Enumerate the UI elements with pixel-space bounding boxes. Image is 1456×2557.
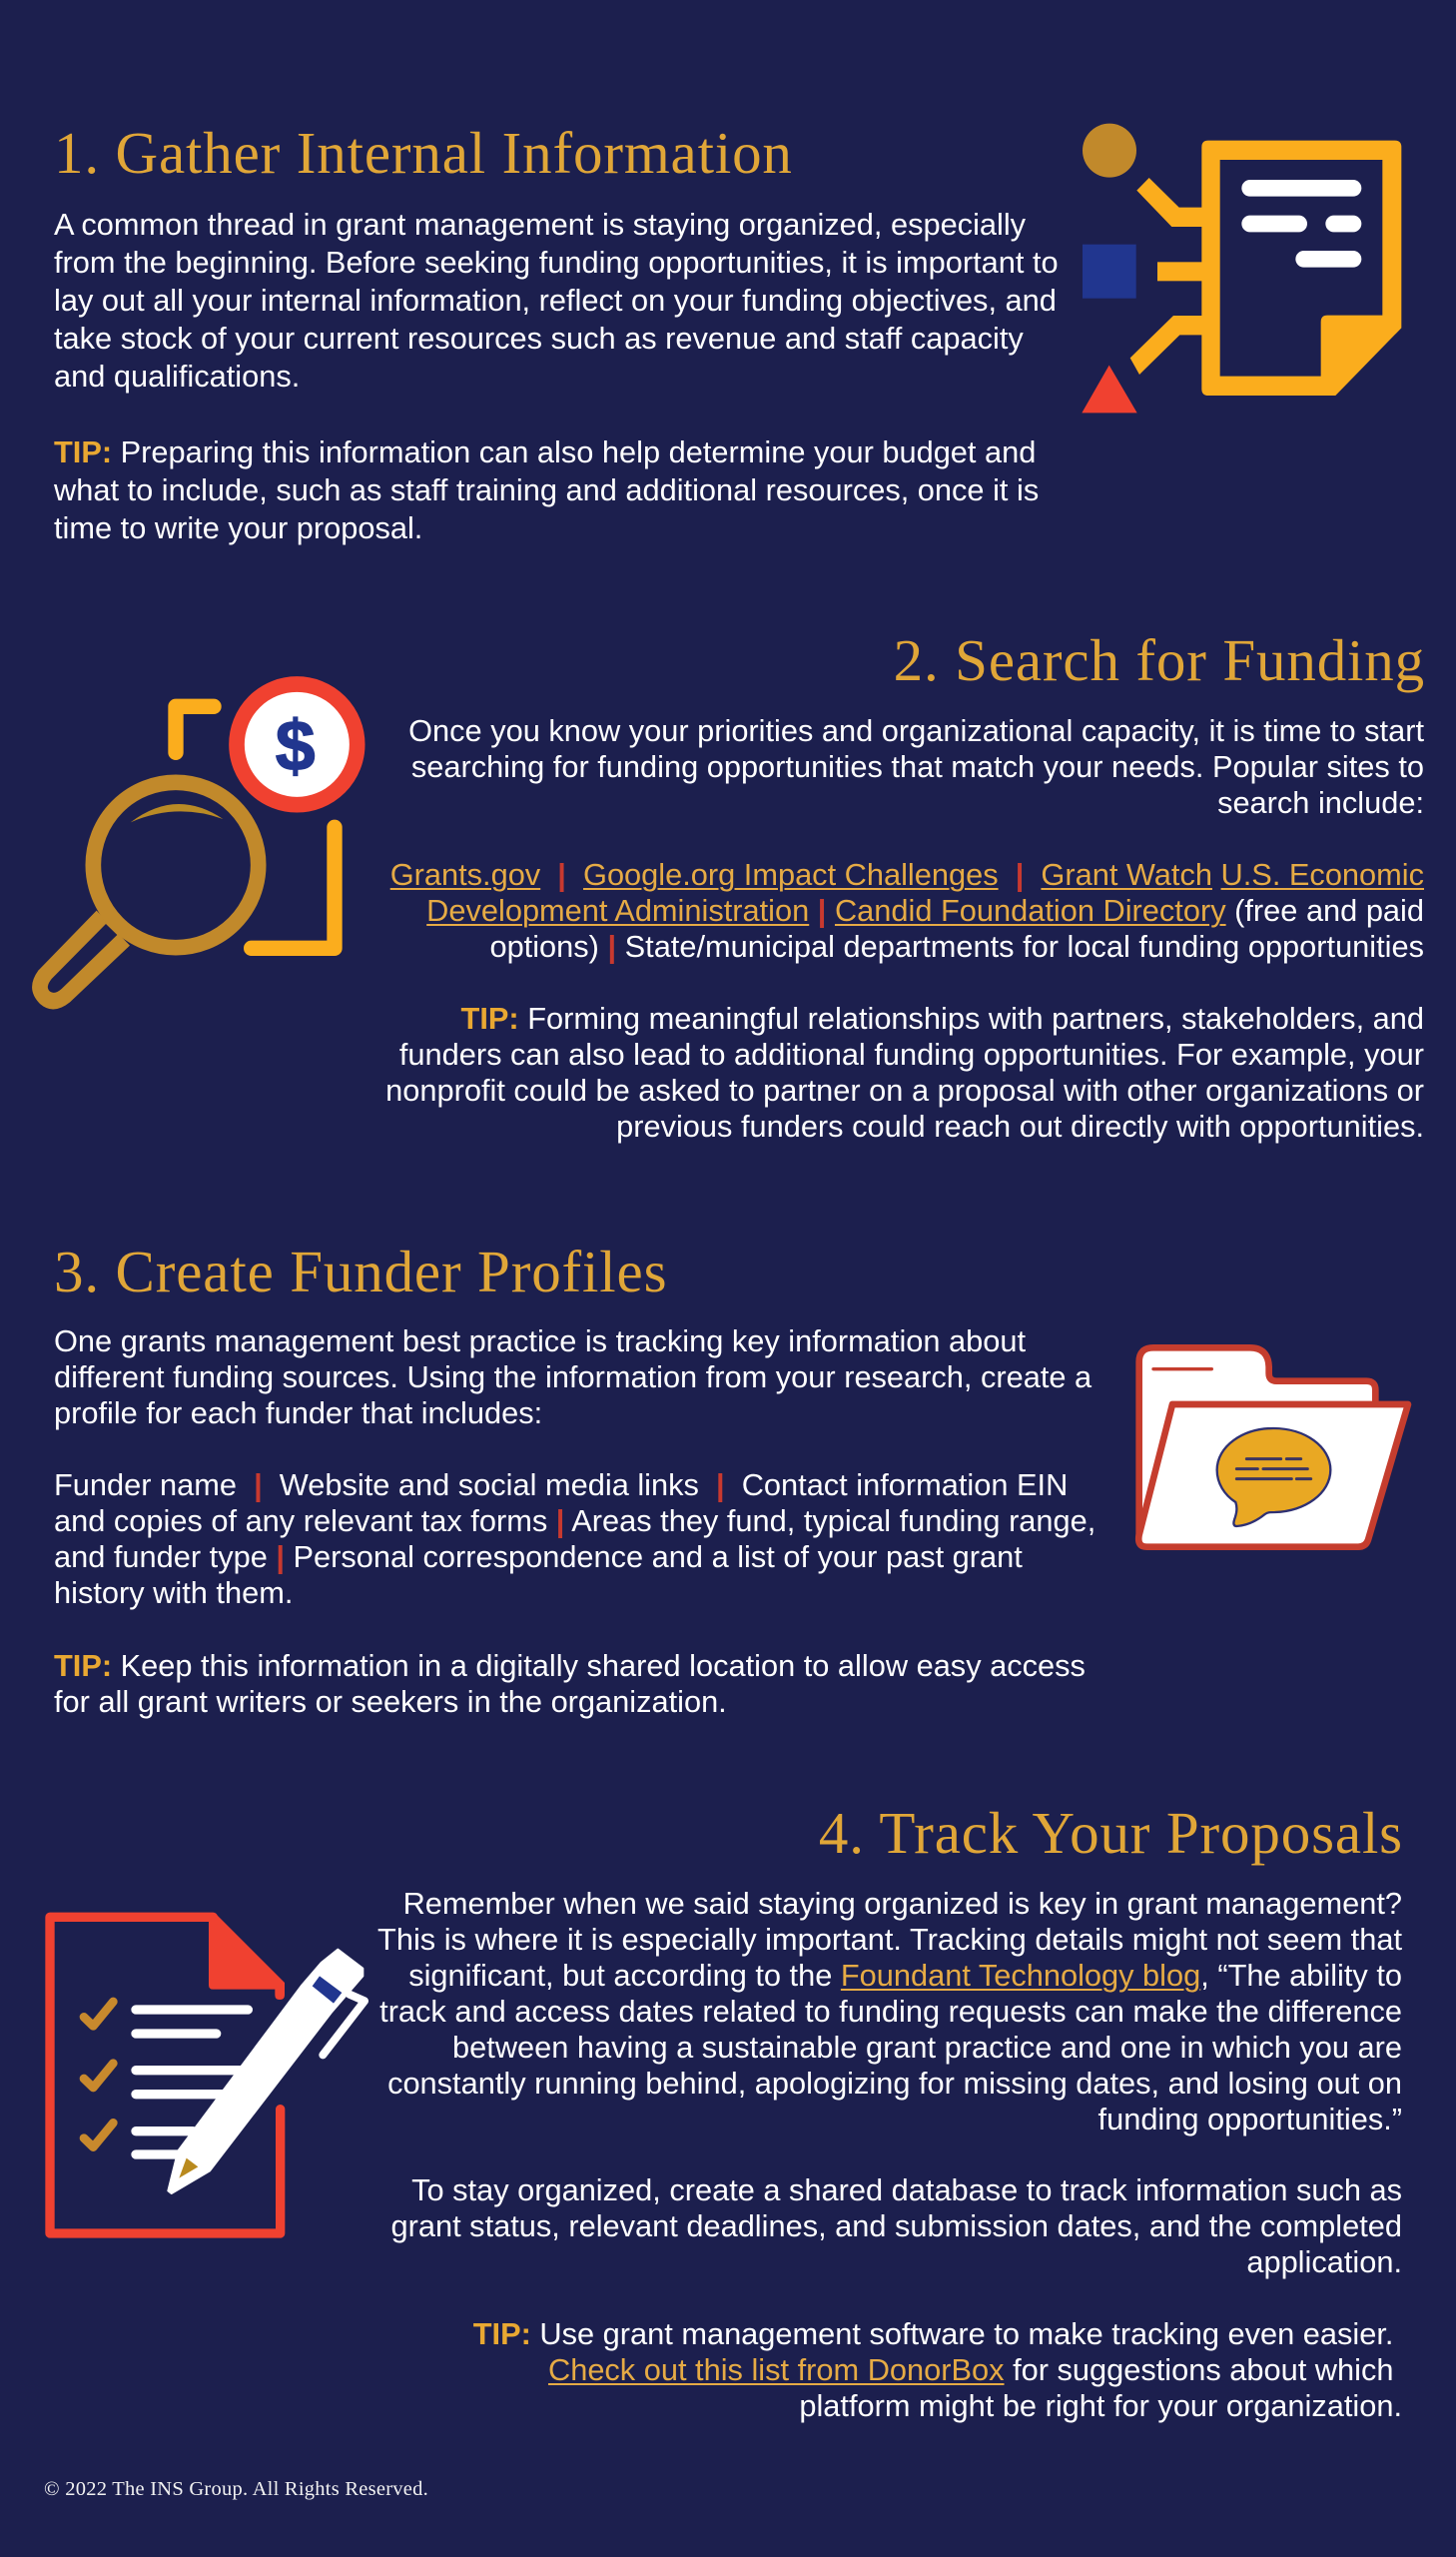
tip: section 2: nonprofit could be asked to partner on a proposal with other organizations or <box>385 1073 1424 1108</box>
heading: 1. Gather Internal Information: 1. Gather Internal Information <box>54 120 793 186</box>
text block: section 1 intro: A common thread in grant management is staying organized, especially <box>54 207 1026 242</box>
tip: section 1: time to write your proposal. <box>54 510 422 545</box>
text block: funder profile items: and funder type | Personal correspondence and a list of your past grant <box>54 1539 1023 1574</box>
heading: 2. Search for Funding: 2. Search for Funding <box>894 627 1425 693</box>
text block: section 4 database advice: To stay organized, create a shared database to track information such as <box>411 2172 1402 2207</box>
text block: section 4 database advice: application. <box>1246 2244 1402 2279</box>
tip: section 2: funders can also lead to additional funding opportunities. For example, your <box>399 1037 1424 1072</box>
text block: funding sites links: Grants.gov | Google.org Impact Challenges | Grant Watch U.S. Economic <box>390 857 1424 892</box>
tip: section 4 <box>473 2316 1402 2423</box>
text block: funder profile items <box>54 1467 1095 1610</box>
tip: section 2 <box>385 1001 1424 1144</box>
icon: magnifier and dollar <box>32 676 365 1009</box>
tip: section 1: TIP: Preparing this information can also help determine your budget and <box>54 434 1036 469</box>
tip: section 2: previous funders could reach out directly with opportunities. <box>616 1109 1424 1144</box>
heading: 3. Create Funder Profiles: 3. Create Funder Profiles <box>54 1239 667 1304</box>
text block: section 1 intro: from the beginning. Before seeking funding opportunities, it is important to <box>54 245 1059 280</box>
heading: 4. Track Your Proposals: 4. Track Your Proposals <box>819 1800 1403 1866</box>
text block: funder profile items: Funder name | Website and social media links | Contact information EIN <box>54 1467 1068 1502</box>
text block: section 4 database advice: grant status, relevant deadlines, and submission dates, and the completed <box>391 2208 1402 2243</box>
tip: section 3: TIP: Keep this information in a digitally shared location to allow easy access <box>54 1648 1086 1683</box>
tip: section 4: Check out this list from DonorBox for suggestions about which <box>548 2352 1393 2387</box>
tip: section 2: TIP: Forming meaningful relationships with partners, stakeholders, and <box>461 1001 1424 1036</box>
text block: section 4 intro: Remember when we said staying organized is key in grant management? <box>403 1886 1402 1921</box>
tip: section 3 <box>54 1648 1086 1719</box>
text block: section 1 intro: take stock of your current resources such as revenue and staff capacity <box>54 321 1024 356</box>
text block: funder profile items: and copies of any relevant tax forms | Areas they fund, typical funding range, <box>54 1503 1095 1538</box>
text block: section 1 intro: lay out all your internal information, reflect on your funding objectives, and <box>54 283 1057 318</box>
tip: section 3: for all grant writers or seekers in the organization. <box>54 1684 727 1719</box>
text block: section 4 intro: constantly running behind, apologizing for missing dates, and losing out on <box>387 2066 1402 2101</box>
text block: section 4 intro <box>377 1886 1402 2136</box>
text block: funder profile items: history with them. <box>54 1575 293 1610</box>
text block: section 4 intro: significant, but according to the Foundant Technology blog, “The ability to <box>408 1958 1402 1993</box>
text block: section 1 intro: and qualifications. <box>54 359 300 394</box>
text block: section 2 intro: Once you know your priorities and organizational capacity, it is time to start <box>408 713 1424 748</box>
tip: section 1 <box>54 434 1039 545</box>
icon: checklist and pen <box>45 1912 368 2238</box>
tip: section 4: platform might be right for your organization. <box>799 2388 1402 2423</box>
text block: section 2 intro: search include: <box>1217 785 1424 820</box>
text block: section 4 intro: between having a sustainable grant practice and one in which you are <box>452 2030 1402 2065</box>
text block: funding sites links: Development Administration | Candid Foundation Directory (free and paid <box>426 893 1424 928</box>
text block: section 3 intro: different funding sources. Using the information from your research, create a <box>54 1359 1092 1394</box>
text block: section 4 database advice <box>391 2172 1402 2279</box>
text block: funding sites links: options) | State/municipal departments for local funding opportunities <box>489 929 1424 964</box>
icon: magnifier and dollar: $ <box>276 706 316 786</box>
text block: section 4 intro: track and access dates related to funding requests can make the difference <box>379 1994 1402 2029</box>
text block: section 4 intro: This is where it is especially important. Tracking details might not seem that <box>377 1922 1402 1957</box>
text block: section 1 intro <box>54 207 1059 394</box>
tip: section 4: TIP: Use grant management software to make tracking even easier. <box>473 2316 1393 2351</box>
footer: copyright: © 2022 The INS Group. All Rights Reserved. <box>44 2478 428 2500</box>
tip: section 1: what to include, such as staff training and additional resources, once it is <box>54 472 1039 507</box>
text block: section 4 intro: funding opportunities.” <box>1098 2102 1402 2136</box>
text block: funding sites links <box>389 857 1424 964</box>
text block: section 3 intro: profile for each funder that includes: <box>54 1395 542 1430</box>
text block: section 2 intro: searching for funding opportunities that match your needs. Popular sites to <box>411 749 1424 784</box>
text block: section 2 intro <box>408 713 1424 820</box>
text block: section 3 intro <box>54 1323 1092 1430</box>
icon: document with shapes <box>1082 124 1402 414</box>
icon: folder with speech bubble <box>1134 1344 1412 1550</box>
text block: section 3 intro: One grants management best practice is tracking key information about <box>54 1323 1026 1358</box>
